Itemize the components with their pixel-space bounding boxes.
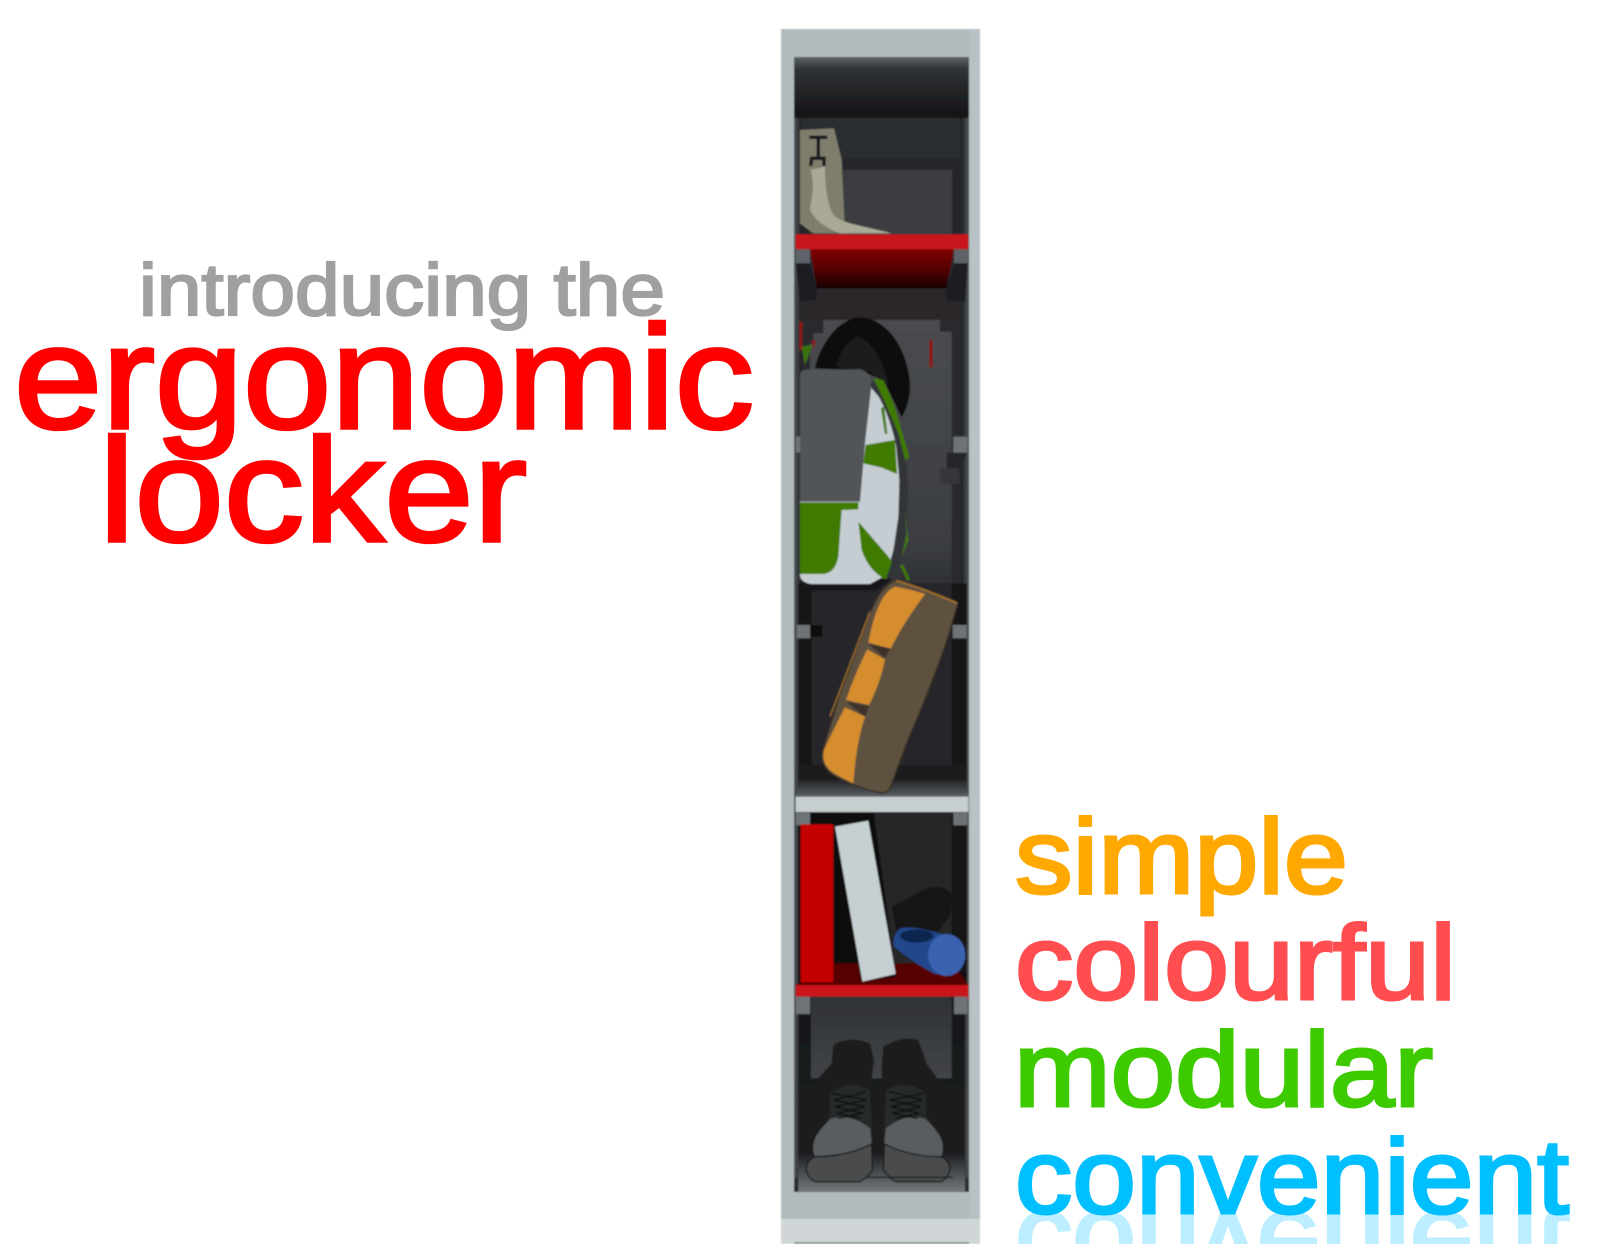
backpack white body bbox=[800, 387, 899, 584]
upper back panel bbox=[796, 283, 967, 600]
shoe compartment bbox=[796, 997, 967, 1192]
white book bbox=[835, 821, 896, 982]
upper clips bbox=[796, 813, 967, 825]
backpack shadow bbox=[801, 578, 893, 591]
orange panels bbox=[823, 587, 925, 783]
left shoe bbox=[806, 1085, 873, 1182]
keyword colourful: colourful bbox=[1015, 904, 1456, 1022]
red shelf floor bbox=[796, 963, 968, 985]
intro line: introducing the bbox=[139, 250, 665, 331]
green straps bbox=[873, 378, 910, 581]
keyword simple: simple bbox=[1015, 798, 1348, 916]
shoe rack line bbox=[867, 1175, 953, 1179]
green scrap bbox=[802, 345, 813, 365]
hat and backpack bbox=[800, 317, 910, 591]
blue bottle bbox=[893, 927, 965, 976]
right shoe bbox=[883, 1085, 950, 1182]
duffel bag bbox=[822, 581, 957, 793]
boot box bbox=[800, 128, 845, 233]
red book bbox=[801, 824, 833, 982]
locker interior bbox=[794, 57, 969, 1192]
white shelf bbox=[796, 797, 968, 812]
title line one: ergonomic bbox=[14, 296, 754, 460]
top red shelf bbox=[796, 234, 968, 249]
book compartment bbox=[796, 813, 968, 1013]
red marks on back wall bbox=[799, 322, 933, 367]
white book shadow bbox=[840, 813, 896, 982]
back wall and floor bbox=[796, 997, 967, 1192]
shoe shadows bbox=[817, 1038, 938, 1133]
locker frame bbox=[781, 29, 980, 1244]
boot shaft bbox=[810, 167, 892, 233]
green patches bbox=[800, 440, 898, 579]
lower back panel behind bag bbox=[796, 583, 968, 812]
keyword modular: modular bbox=[1014, 1011, 1433, 1129]
clips lower bbox=[797, 625, 967, 638]
lower red shelf bbox=[796, 985, 968, 999]
locker illustration bbox=[781, 29, 980, 1244]
backpack grey flap bbox=[800, 369, 872, 502]
red shelf underside bbox=[810, 249, 954, 288]
boot figure mark bbox=[809, 137, 827, 166]
title line two: locker bbox=[99, 409, 527, 573]
backpack strap bbox=[873, 382, 904, 578]
keyword convenient: convenient bbox=[1015, 1118, 1569, 1236]
boot on top shelf bbox=[796, 128, 968, 302]
hat bbox=[815, 317, 910, 417]
clips middle bbox=[796, 437, 967, 483]
shelf brackets bbox=[796, 249, 968, 302]
bag seams bbox=[830, 581, 957, 743]
lower clips bbox=[796, 999, 967, 1013]
compartment back bbox=[798, 813, 967, 986]
black object bbox=[892, 887, 952, 937]
